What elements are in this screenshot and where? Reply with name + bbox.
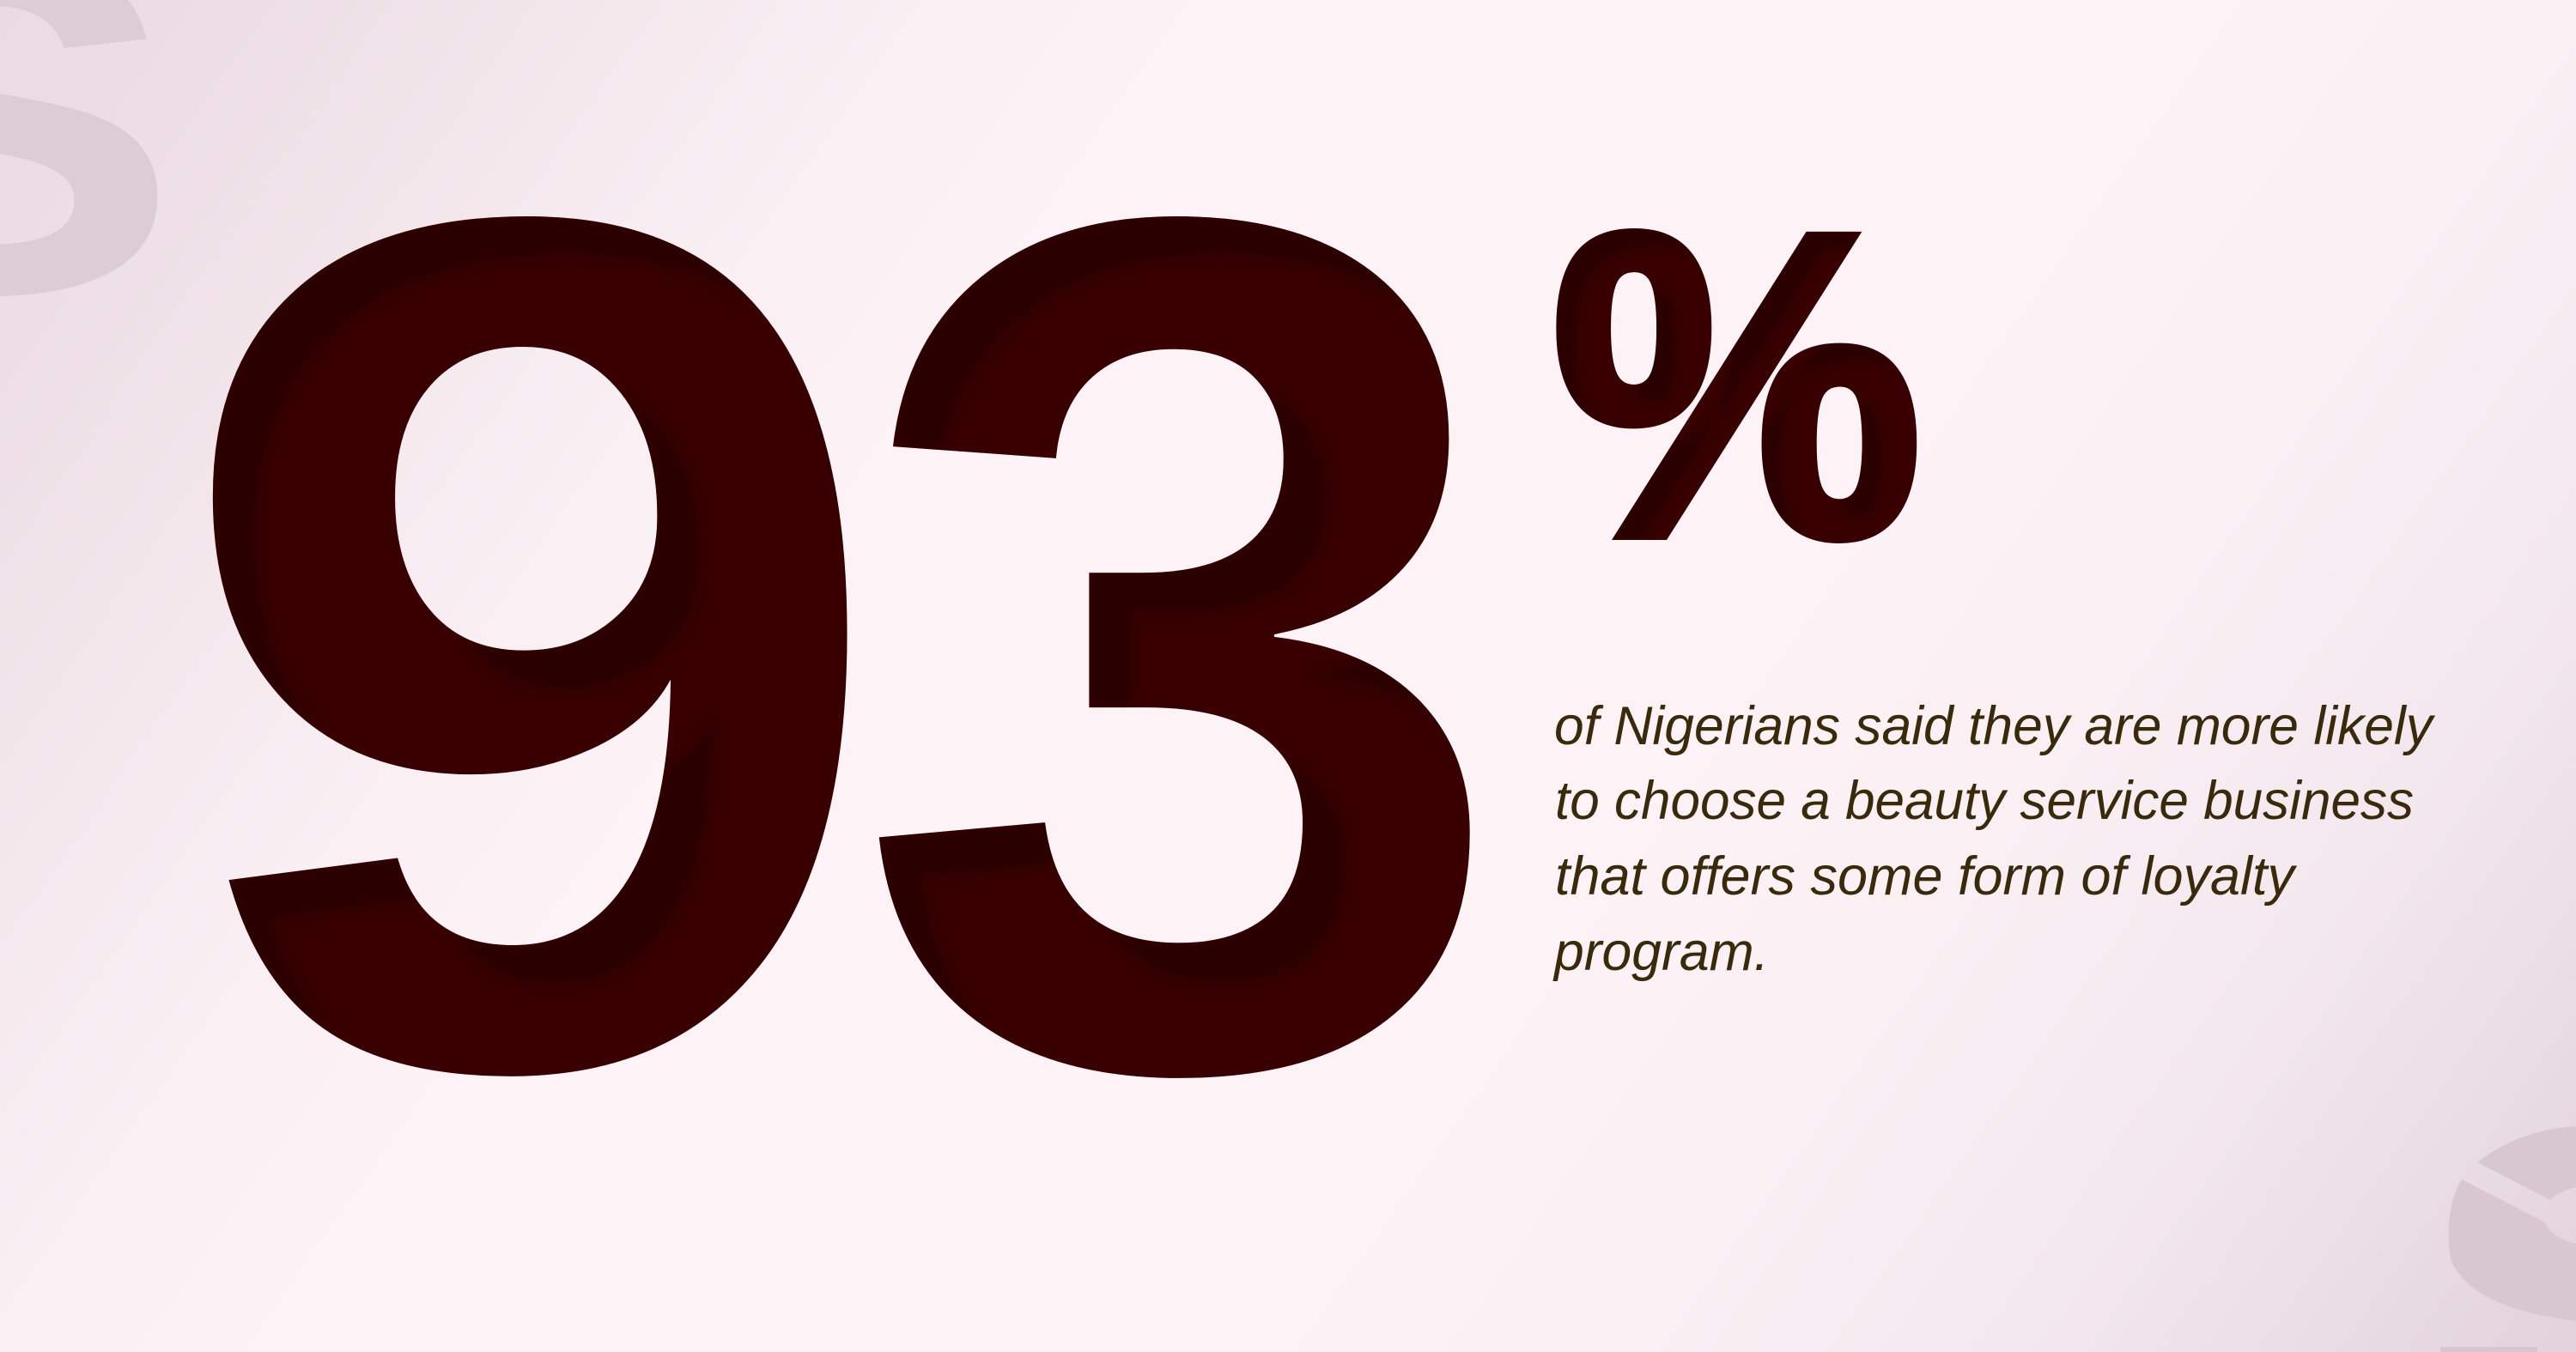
description text block: program. bbox=[1552, 922, 1769, 982]
description text block: to choose a beauty service business bbox=[1555, 771, 2414, 831]
percent sign: % bbox=[1552, 143, 1923, 626]
digit 9: 9 bbox=[167, 0, 896, 1322]
description text block: that offers some form of loyalty bbox=[1555, 846, 2297, 906]
big number: 93 bbox=[167, 0, 1513, 1322]
digit 3: 3 bbox=[852, 0, 1513, 1322]
description text block bbox=[1552, 696, 2435, 982]
decorative watermark shape, bottom right bbox=[2440, 1126, 2576, 1352]
description text block: of Nigerians said they are more likely bbox=[1554, 696, 2435, 756]
